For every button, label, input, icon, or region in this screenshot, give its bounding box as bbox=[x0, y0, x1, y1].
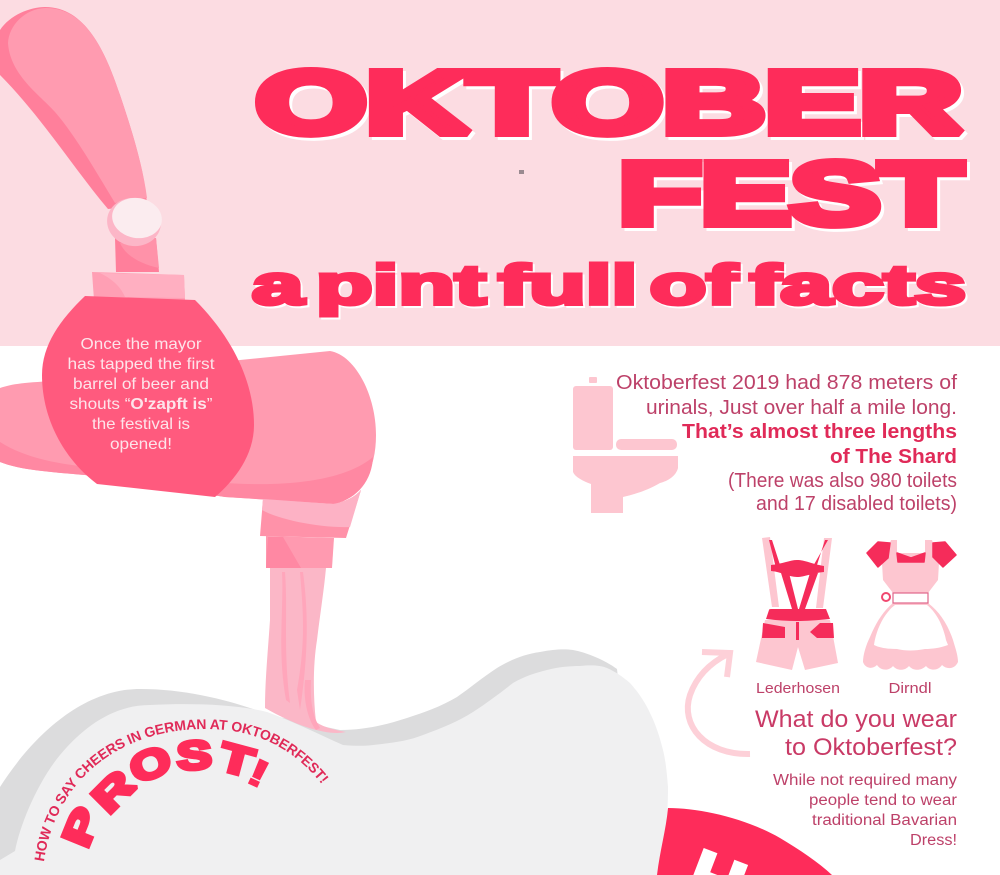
text: urinals fact: of The Shard bbox=[830, 446, 957, 468]
red circle badge bbox=[657, 808, 832, 875]
heading: what do you wear bbox=[755, 706, 957, 761]
text: tapping the barrel: shouts “O'zapft is ” bbox=[70, 396, 212, 413]
title shadow: a pint full of facts bbox=[254, 255, 968, 318]
prost: ! bbox=[241, 750, 276, 797]
title main text: FEST bbox=[619, 144, 962, 243]
heading: what do you wear: What do you wear bbox=[755, 706, 957, 733]
label: dirndl: Dirndl bbox=[888, 681, 932, 697]
speck bbox=[519, 170, 524, 174]
prost: T bbox=[215, 735, 258, 786]
text: tapping the barrel: barrel of beer and bbox=[73, 376, 209, 393]
tap neck bbox=[115, 238, 159, 272]
title main text: a pint full of facts bbox=[252, 253, 966, 316]
title main text: OKTOBER bbox=[256, 53, 962, 152]
title shadow: OKTOBER bbox=[259, 56, 965, 155]
tap collar bbox=[92, 272, 185, 300]
prost: S bbox=[176, 732, 213, 779]
text: urinals fact: urinals, Just over half a mile long. bbox=[646, 397, 957, 419]
label: lederhosen: Lederhosen bbox=[756, 681, 840, 697]
prost: O bbox=[124, 736, 177, 792]
text: tapping the barrel: Once the mayor bbox=[80, 336, 202, 353]
title shadow: FEST bbox=[622, 147, 965, 246]
text: tapping the barrel: has tapped the first bbox=[68, 356, 215, 373]
text: traditional dress: While not required many bbox=[773, 772, 957, 789]
tap body bbox=[0, 351, 376, 504]
tap spout bbox=[266, 536, 334, 568]
tap knob bbox=[103, 194, 165, 250]
prost bbox=[54, 732, 276, 853]
curved caption: HOW TO SAY CHEERS IN GERMAN AT OKTOBERFEST! bbox=[34, 719, 328, 861]
prost: P bbox=[54, 801, 109, 853]
title shadow bbox=[254, 56, 968, 318]
text: tapping the barrel: the festival is bbox=[92, 416, 190, 433]
hill bbox=[0, 649, 668, 875]
text: tapping the barrel: opened! bbox=[110, 436, 172, 453]
tap handle bbox=[0, 7, 147, 209]
icon: lederhosen bbox=[756, 537, 838, 670]
text: tapping the barrel bbox=[68, 336, 215, 453]
text: traditional dress: people tend to wear bbox=[809, 792, 957, 809]
text: urinals fact: (There was also 980 toilets bbox=[728, 470, 957, 492]
text: urinals fact: That’s almost three lengths bbox=[682, 421, 957, 443]
text: traditional dress: traditional Bavarian bbox=[812, 812, 957, 829]
icon: toilet bbox=[573, 377, 678, 513]
title bbox=[252, 53, 968, 318]
text: traditional dress bbox=[773, 772, 957, 849]
arrow bbox=[688, 652, 750, 754]
icon: dirndl bbox=[863, 540, 958, 670]
title main text bbox=[252, 53, 966, 316]
heading: what do you wear: to Oktoberfest? bbox=[785, 734, 957, 761]
header band bbox=[0, 0, 1000, 346]
text: traditional dress: Dress! bbox=[910, 832, 957, 849]
text: urinals fact: Oktoberfest 2019 had 878 meters of bbox=[616, 372, 957, 394]
prost: R bbox=[84, 762, 144, 822]
barrel band bbox=[42, 296, 254, 497]
text: urinals fact: and 17 disabled toilets) bbox=[756, 493, 957, 515]
text: urinals fact bbox=[616, 372, 957, 515]
tap ring bbox=[260, 490, 361, 538]
beer pour bbox=[265, 568, 346, 733]
